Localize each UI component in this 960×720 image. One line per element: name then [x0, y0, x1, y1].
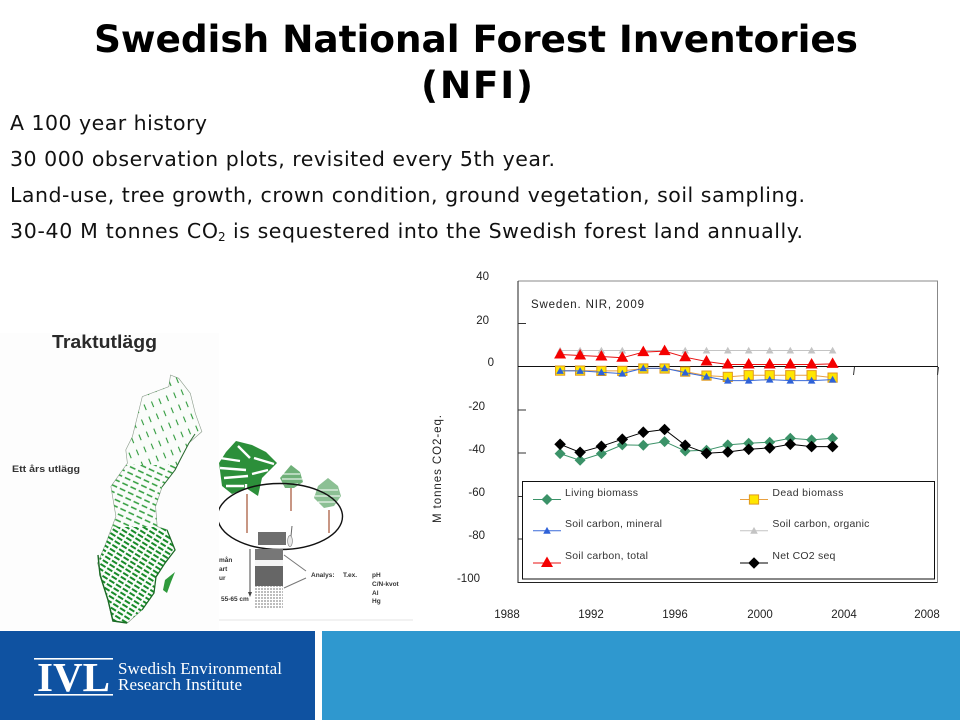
- x axis labels: [494, 609, 940, 621]
- logo: institute name: [118, 659, 282, 694]
- x axis labels: 2000: [747, 609, 773, 621]
- icon: soil spade: [288, 526, 292, 546]
- title: (NFI): [421, 63, 533, 107]
- soil labels: Al: [372, 590, 379, 597]
- soil labels: [219, 556, 400, 605]
- x axis labels: 1996: [662, 609, 688, 621]
- soil labels: pH: [372, 572, 381, 579]
- map heading: Traktutlägg: [52, 332, 157, 352]
- bullet text block: is sequestered into the Swedish forest land annually.: [233, 219, 803, 243]
- logo: institute name: Research Institute: [118, 675, 242, 694]
- bullet text block: A 100 year history: [10, 111, 207, 135]
- y axis labels: -40: [468, 444, 485, 456]
- map of Sweden with sample tracts: [97, 374, 202, 624]
- depth arrow: [248, 549, 252, 597]
- series: soil carbon total: [560, 351, 833, 364]
- legend: living biomass: Living biomass: [565, 487, 638, 499]
- chart source note: Sweden. NIR, 2009: [531, 299, 644, 311]
- y axis labels: 0: [488, 357, 494, 369]
- line chart: M tonnes CO2-eq: [432, 271, 940, 621]
- plot frame: [518, 281, 938, 582]
- bullet text block: Land-use, tree growth, crown condition, ground vegetation, soil sampling.: [10, 183, 805, 207]
- x axis labels: 2004: [831, 609, 857, 621]
- footer: logo block: [0, 631, 315, 720]
- soil labels: 55-65 cm: [221, 596, 249, 603]
- y axis labels: -20: [468, 401, 485, 413]
- x axis labels: 2008: [914, 609, 940, 621]
- legend: dead biomass: [740, 487, 843, 500]
- legend: soil carbon organic: Soil carbon, organic: [772, 518, 869, 530]
- logo: institute name: Swedish Environmental: [118, 659, 282, 678]
- series: soil carbon organic: [560, 350, 833, 352]
- soil labels: art: [219, 566, 228, 573]
- x axis labels: 1988: [494, 609, 520, 621]
- series: soil carbon mineral: [560, 368, 833, 381]
- map panel: Traktutlägg: [12, 334, 202, 624]
- y axis title: M tonnes CO2-eq.: [432, 415, 444, 523]
- footer: light blue block: [322, 631, 960, 720]
- legend: [522, 482, 934, 579]
- soil labels: ur: [219, 575, 226, 582]
- icon: trunks: [247, 488, 329, 533]
- legend: soil carbon mineral: Soil carbon, mineral: [565, 518, 662, 530]
- soil labels: Analys:: [311, 572, 334, 579]
- footer band: [0, 631, 960, 720]
- title: Swedish National Forest Inventories: [94, 17, 858, 61]
- bullet text block: 30-40 M tonnes CO: [10, 219, 218, 243]
- ground vegetation: [258, 532, 286, 545]
- legend: soil carbon total: [533, 550, 648, 563]
- legend: net CO2 seq: Net CO2 seq: [772, 550, 836, 562]
- bullet text block: 2: [218, 230, 226, 244]
- logo: IVL wordmark: IVL: [37, 654, 110, 700]
- legend: soil carbon total: Soil carbon, total: [565, 550, 648, 562]
- series: living biomass: [560, 438, 833, 460]
- analysis arrows: [284, 555, 306, 588]
- soil column: [255, 549, 283, 608]
- bullet text block: [10, 111, 805, 244]
- legend: net CO2 seq: [740, 550, 836, 563]
- y axis labels: 20: [476, 315, 489, 327]
- y axis labels: -80: [468, 530, 485, 542]
- icon: medium tree: [280, 465, 303, 488]
- legend: living biomass: [533, 487, 638, 500]
- bullet text block: 30 000 observation plots, revisited every 5th year.: [10, 147, 555, 171]
- legend: dead biomass: Dead biomass: [772, 487, 843, 499]
- y axis labels: -60: [468, 487, 485, 499]
- soil labels: Hg: [372, 598, 381, 605]
- icon: large tree: [219, 441, 277, 496]
- title: [94, 17, 858, 107]
- plot illustration panel: [219, 441, 413, 620]
- y axis labels: 40: [476, 271, 489, 283]
- map label: Ett års utlägg: [12, 464, 80, 475]
- y axis labels: [457, 271, 494, 585]
- icon: small tree: [314, 478, 341, 508]
- soil labels: mån: [219, 556, 232, 564]
- y axis labels: -100: [457, 573, 480, 585]
- x axis labels: 1992: [578, 609, 604, 621]
- soil labels: C/N-kvot: [372, 581, 400, 588]
- soil labels: T.ex.: [343, 572, 357, 579]
- series: dead biomass: [560, 368, 833, 378]
- series: net CO2 sequestration: [560, 430, 833, 453]
- sample plot ellipse: [218, 484, 342, 550]
